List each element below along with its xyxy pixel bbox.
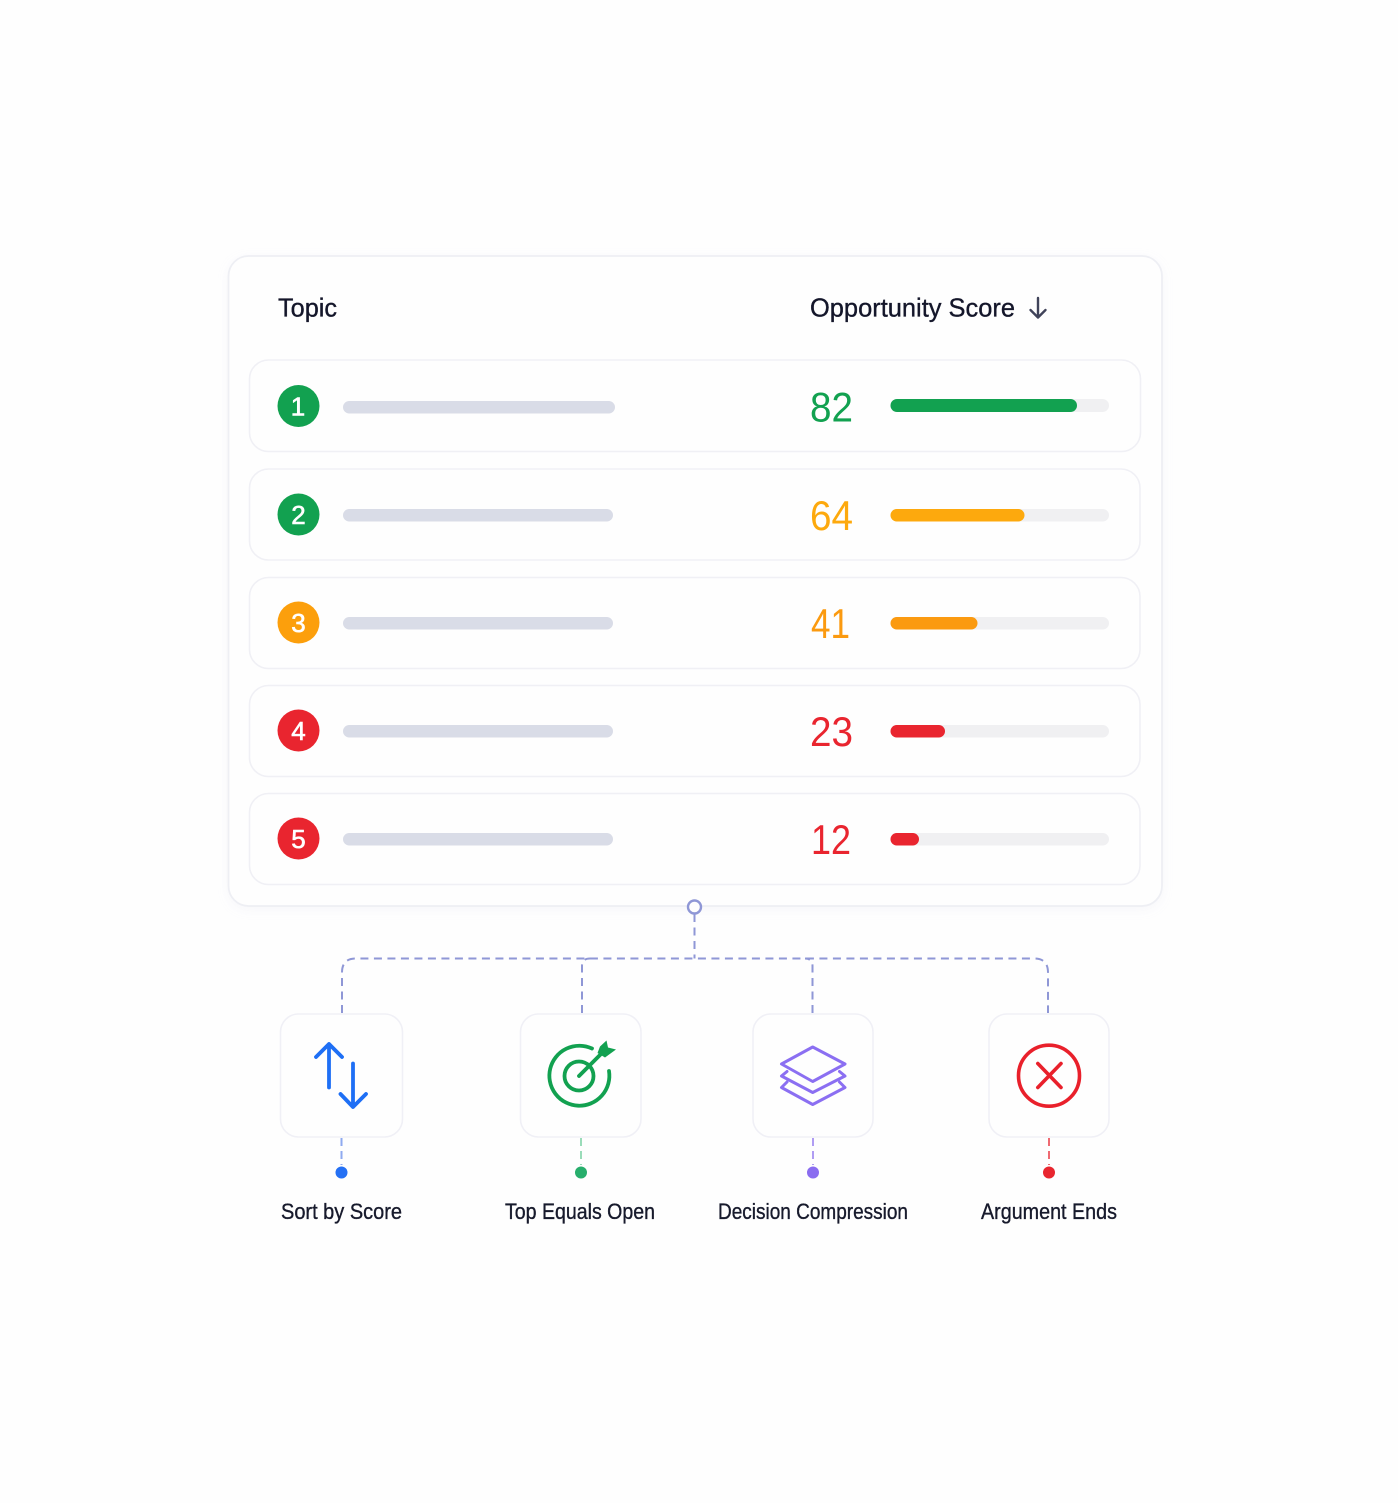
row 1 bbox=[250, 360, 1140, 452]
label: Argument Ends bbox=[981, 1199, 1117, 1224]
feature: Sort by Score bbox=[280, 1014, 402, 1224]
stem and dot bbox=[575, 1138, 587, 1178]
rank badge 5 bbox=[278, 818, 320, 860]
rank badge 2 bbox=[278, 494, 320, 536]
rank badge 3 bbox=[278, 602, 320, 644]
row 5 bbox=[250, 794, 1140, 884]
topic placeholder bar 5 bbox=[343, 833, 613, 846]
heading: Topic: Topic bbox=[278, 292, 337, 322]
rank badge 4: 4 bbox=[291, 716, 306, 746]
stem and dot bbox=[807, 1138, 819, 1178]
row 4 bbox=[250, 686, 1140, 776]
rank badge 4 bbox=[278, 710, 320, 752]
topic placeholder bar 2 bbox=[343, 509, 613, 522]
icon card: x in circle bbox=[989, 1014, 1109, 1137]
score 41: 41 bbox=[811, 600, 850, 647]
icon card: layers bbox=[753, 1014, 873, 1137]
stem and dot bbox=[336, 1138, 348, 1178]
rank badge 2: 2 bbox=[291, 500, 306, 530]
icon: sort down arrow bbox=[1030, 298, 1046, 318]
score bar 82 bbox=[890, 399, 1109, 412]
topic placeholder bar 4 bbox=[343, 725, 613, 738]
score 64: 64 bbox=[810, 492, 853, 539]
score 82: 82 bbox=[810, 384, 853, 430]
row 3 bbox=[250, 578, 1140, 668]
label: Top Equals Open bbox=[505, 1199, 655, 1224]
feature: Argument Ends bbox=[981, 1014, 1117, 1224]
connector tree bbox=[342, 900, 1048, 1013]
icon card: target bbox=[520, 1014, 641, 1137]
score bar 41 bbox=[890, 617, 1109, 630]
score bar 64 bbox=[890, 509, 1109, 522]
score 12: 12 bbox=[811, 816, 851, 863]
stem and dot bbox=[1043, 1138, 1055, 1178]
feature: Top Equals Open bbox=[505, 1014, 655, 1224]
rank badge 1: 1 bbox=[291, 392, 305, 422]
label: Sort by Score bbox=[281, 1199, 402, 1224]
score 23: 23 bbox=[810, 708, 853, 755]
topic placeholder bar 3 bbox=[343, 617, 613, 630]
row 2 bbox=[250, 469, 1140, 560]
icon card: sort arrows bbox=[280, 1014, 402, 1137]
topic placeholder bar 1 bbox=[343, 401, 615, 414]
feature: Decision Compression bbox=[718, 1014, 908, 1224]
score bar 12 bbox=[890, 833, 1109, 846]
rank badge 3: 3 bbox=[291, 608, 306, 638]
rank badge 1 bbox=[278, 385, 320, 427]
rank badge 5: 5 bbox=[291, 824, 306, 854]
heading: Opportunity Score: Opportunity Score bbox=[810, 292, 1015, 322]
label: Decision Compression bbox=[718, 1199, 908, 1224]
panel: ranking table bbox=[228, 256, 1162, 906]
score bar 23 bbox=[890, 725, 1109, 738]
